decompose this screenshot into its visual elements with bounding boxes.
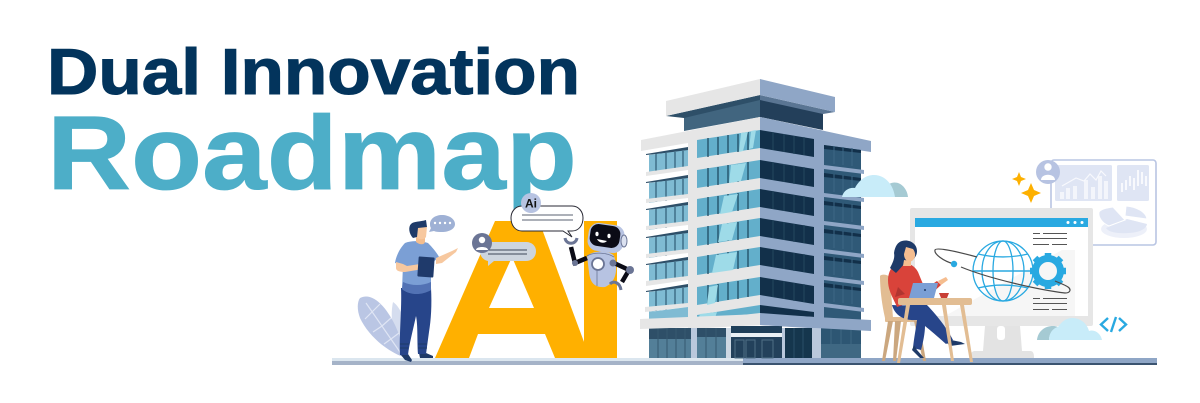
icon: person circle	[1036, 160, 1060, 184]
body	[587, 252, 616, 287]
head	[416, 234, 425, 244]
building	[640, 79, 871, 358]
ground floor	[649, 326, 861, 358]
pie chart	[1099, 206, 1147, 238]
person: man with tablet	[395, 215, 458, 362]
title: Dual Innovation: Dual Innovation	[47, 35, 580, 108]
AI letters	[435, 221, 617, 358]
speech bubble	[429, 215, 455, 232]
roof slab	[666, 79, 835, 131]
laptop	[909, 283, 938, 298]
icon: code brackets	[1101, 317, 1126, 332]
trousers	[400, 288, 431, 355]
cloud front	[842, 175, 895, 197]
tower left face	[688, 117, 760, 329]
centre right windows	[760, 130, 814, 317]
candlestick chart	[1117, 165, 1149, 201]
cloud bottom	[1037, 318, 1102, 340]
torso	[888, 263, 941, 307]
right wing	[824, 145, 864, 325]
title: Roadmap: Roadmap	[47, 95, 577, 212]
icon: leaves	[358, 297, 405, 357]
globe	[973, 241, 1033, 301]
tablet	[417, 256, 435, 278]
dashboard panel	[1051, 160, 1156, 245]
arms	[571, 247, 587, 263]
monitor	[910, 208, 1093, 358]
bubble: Ai comment: Ai	[525, 196, 537, 210]
shirt	[395, 241, 439, 294]
line and bar chart	[1055, 165, 1112, 201]
arms	[396, 262, 423, 272]
ground line	[332, 358, 1157, 365]
icon: stars	[1012, 172, 1041, 203]
left wing	[645, 147, 688, 322]
shoes	[401, 353, 433, 362]
cup	[939, 293, 949, 298]
orbit	[935, 249, 1070, 293]
centre left windows	[697, 130, 760, 320]
head	[890, 241, 917, 273]
tower right face	[760, 117, 824, 329]
legs	[892, 303, 953, 350]
base slab	[640, 314, 760, 329]
gear	[1030, 253, 1066, 289]
table	[897, 298, 973, 363]
text lines	[1033, 234, 1067, 310]
bubble: Ai comment	[511, 193, 583, 237]
claws	[565, 238, 577, 243]
person: woman at laptop	[880, 241, 973, 363]
robot	[565, 222, 634, 290]
top slab	[641, 117, 760, 151]
cloud behind building	[889, 182, 908, 197]
bubble: grey comment	[472, 233, 536, 266]
head	[586, 222, 626, 254]
chair	[880, 275, 926, 361]
